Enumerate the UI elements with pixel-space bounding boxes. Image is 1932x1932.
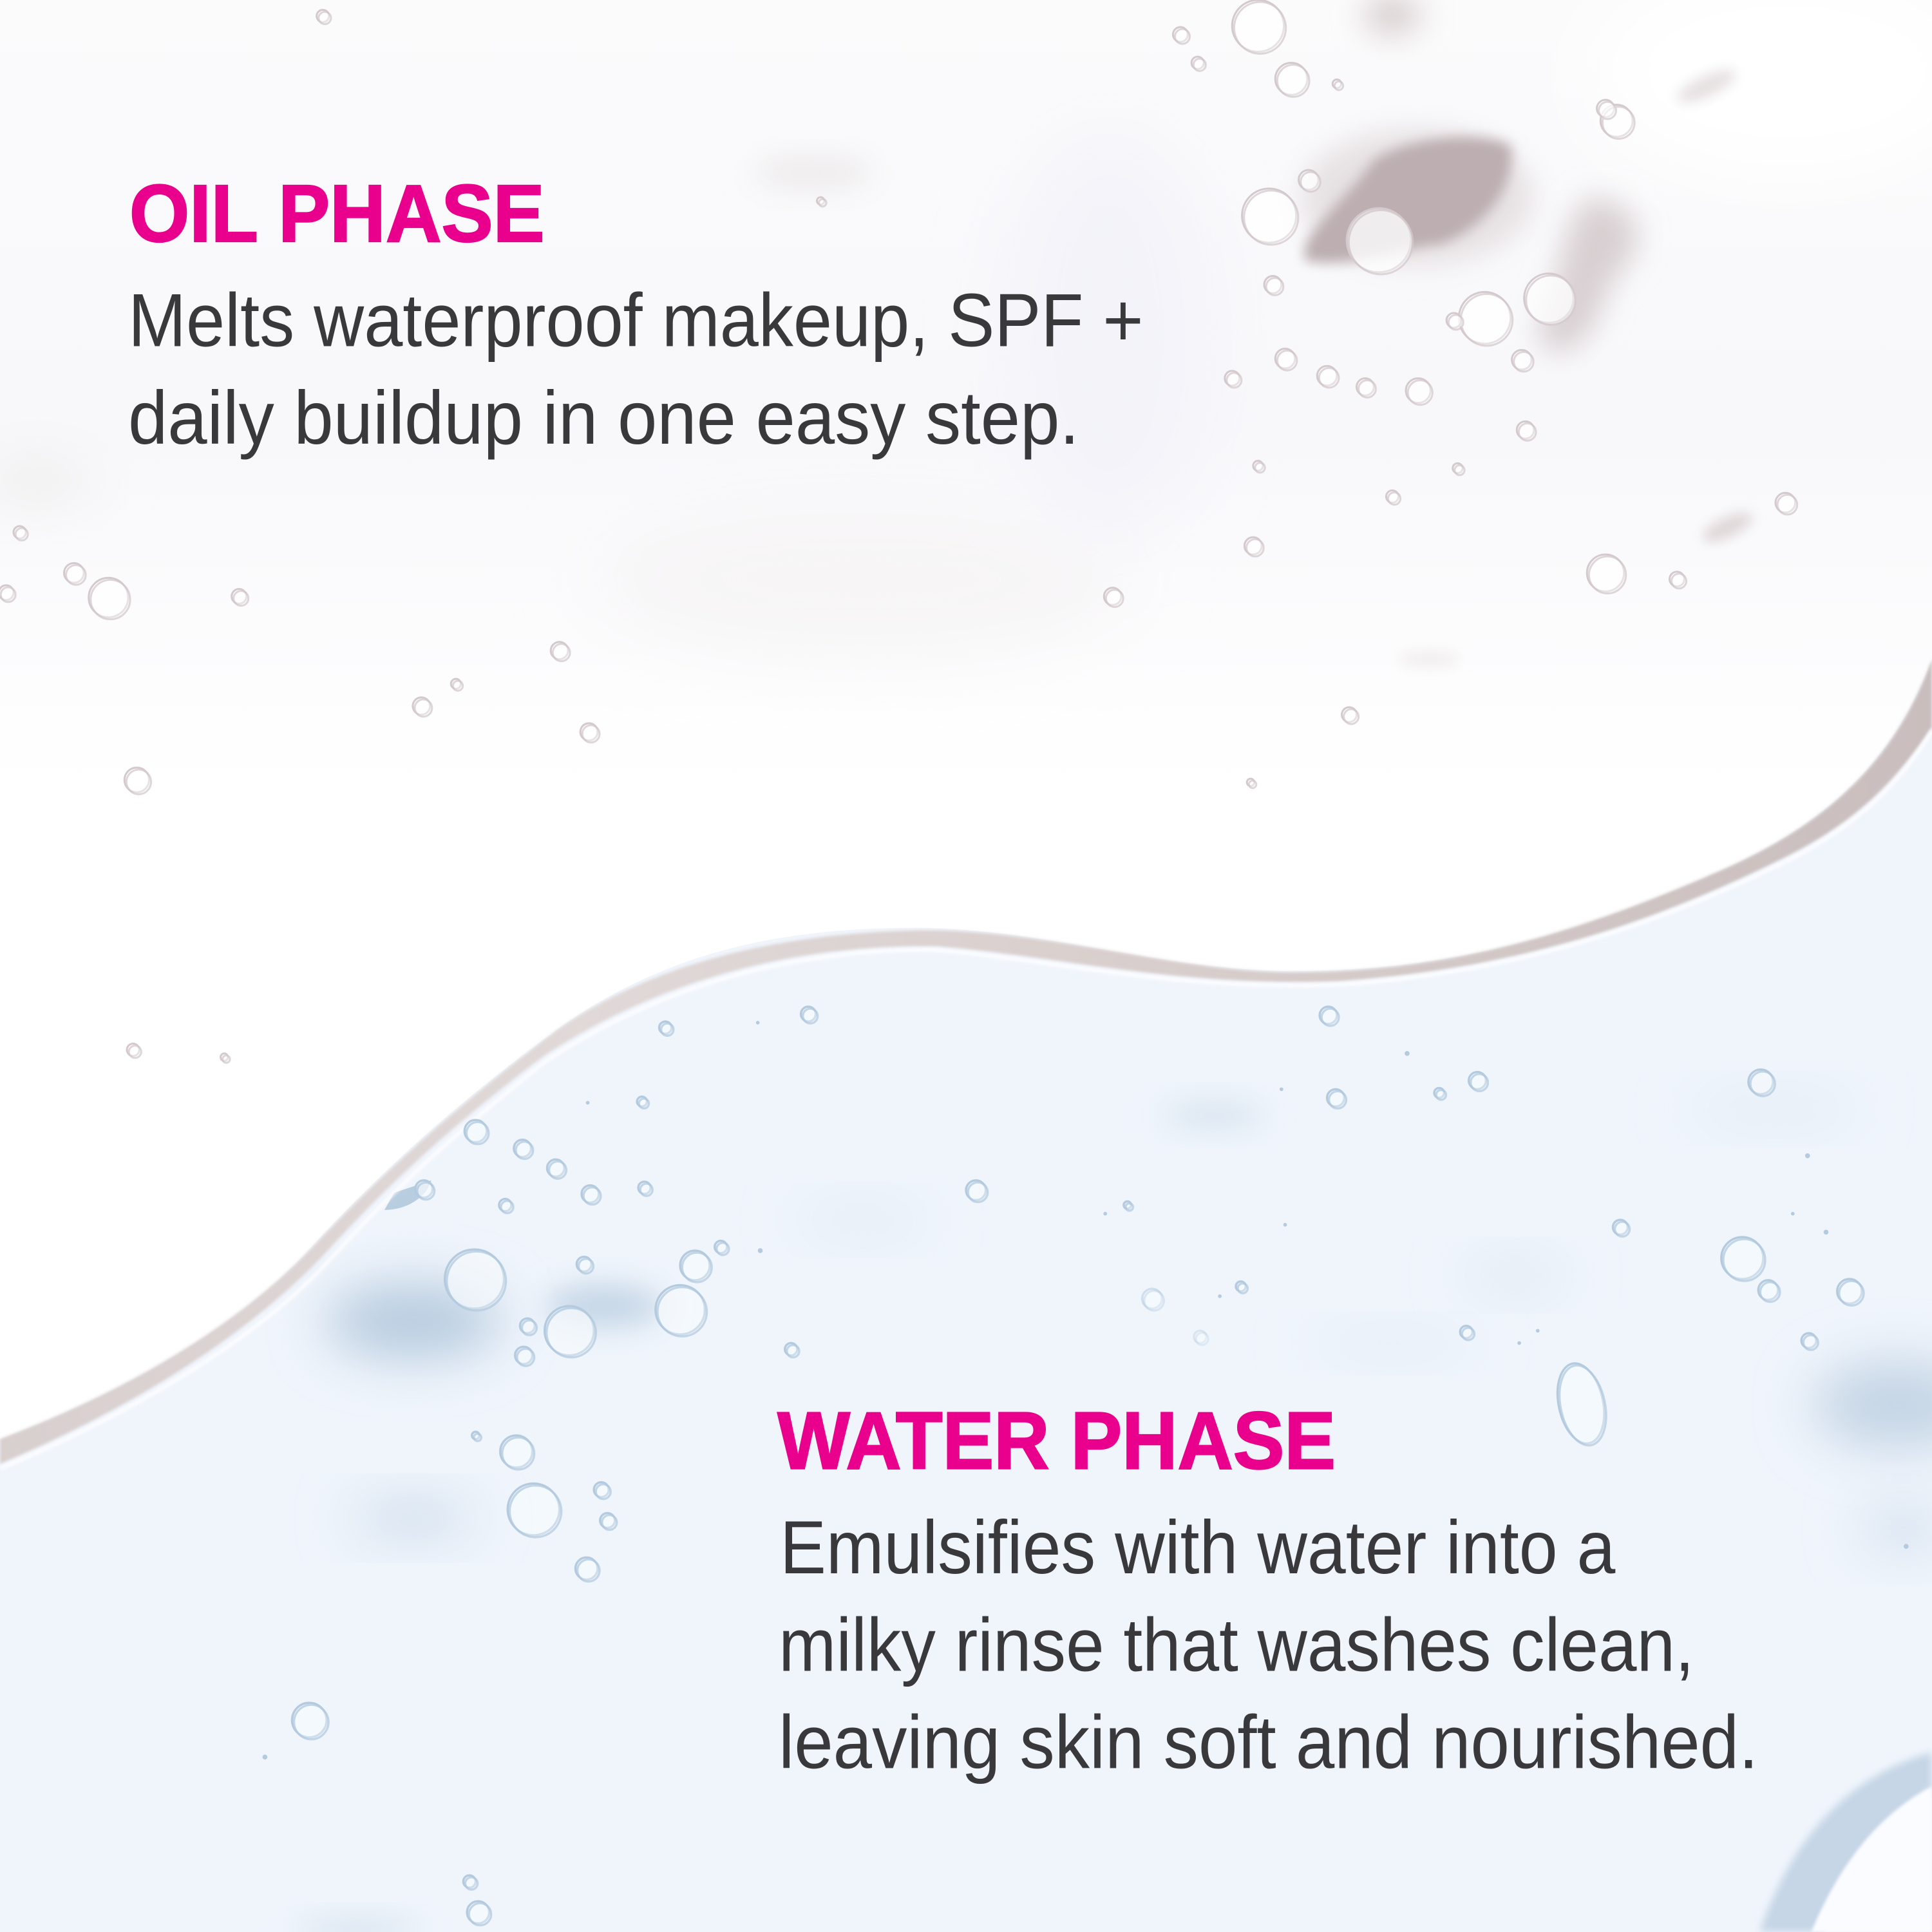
water bubbles [292,1007,1862,1924]
text block: water phase description: milky rinse that washes clean, [779,1602,1694,1687]
heading: water phase: WATER PHASE [777,1396,1336,1486]
text block: oil phase description: Melts waterproof makeup, SPF + [128,278,1144,363]
water shadow blobs [296,1094,1932,1932]
panel: water phase text [777,1396,1758,1785]
text block: oil phase description: daily buildup in one easy step. [128,375,1079,460]
panel: oil phase text [128,168,1144,460]
background: oil phase [0,0,1932,1439]
text block: water phase description: leaving skin soft and nourished. [779,1700,1758,1785]
rim: boundary between oil and water [0,659,1932,1469]
text block: oil phase description [128,278,1144,460]
oil soft tone blobs [0,0,1932,668]
text block: water phase description [779,1505,1758,1785]
bottom right pool corner [1759,1752,1932,1932]
heading: oil phase: OIL PHASE [129,168,545,259]
text block: water phase description: Emulsifies with water into a [780,1505,1615,1589]
oil bubbles [0,0,1795,1061]
tiny specks [263,1021,1909,1759]
water bubble partly under rim [384,1180,431,1210]
